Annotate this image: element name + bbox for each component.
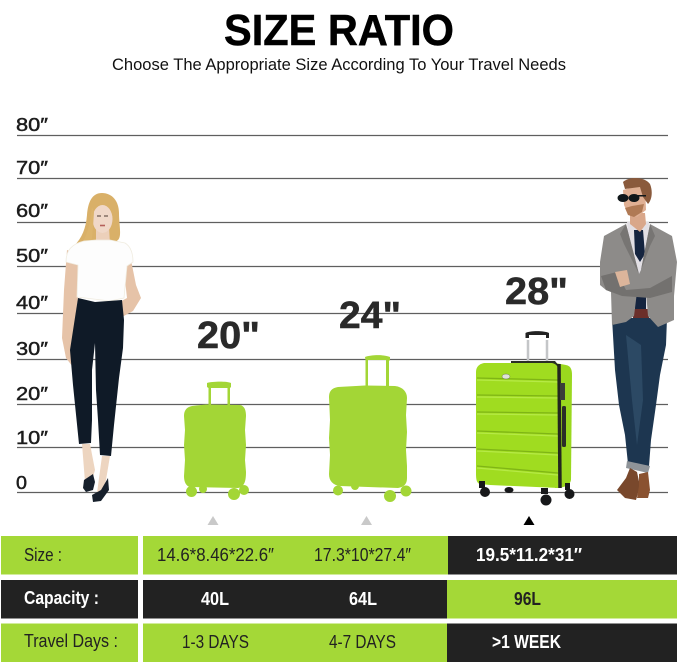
zipper	[559, 364, 560, 488]
marker triangle 20 inch	[208, 516, 218, 525]
height scale: 10″	[16, 428, 49, 448]
subtitle: Choose The Appropriate Size According To Your Travel Needs	[112, 55, 566, 74]
row: size: 14.6*8.46*22.6″	[157, 545, 275, 565]
size label 28 inch: 28"	[505, 271, 568, 313]
heels	[83, 474, 109, 502]
rear shell	[555, 363, 572, 488]
white T-shirt	[66, 240, 133, 301]
ribs	[477, 378, 558, 473]
row: capacity: 40L	[201, 589, 229, 609]
marker triangle 24 inch	[361, 516, 372, 525]
woman figure	[62, 193, 141, 502]
shirt and tie	[627, 222, 649, 312]
arms	[62, 250, 81, 371]
badge	[502, 374, 510, 379]
rib highlights	[477, 380, 558, 475]
face	[623, 184, 646, 217]
height scale: 30″	[16, 339, 49, 359]
wheels	[479, 481, 574, 506]
size label 20 inch: 20"	[197, 315, 260, 357]
row: travel days: >1 WEEK	[492, 632, 561, 652]
jeans highlights	[626, 335, 643, 445]
height scale	[16, 115, 668, 493]
beard	[625, 204, 644, 217]
height scale: 50″	[16, 246, 49, 266]
row: capacity: Capacity :	[24, 588, 99, 608]
black trousers	[70, 298, 124, 456]
wheels	[333, 486, 343, 496]
eyes and lips	[97, 215, 108, 217]
body	[184, 404, 246, 488]
brown shoes	[617, 468, 640, 500]
grey blazer	[600, 224, 677, 327]
telescopic handle	[207, 382, 231, 405]
wheels	[186, 486, 197, 497]
top zipper edge	[511, 361, 560, 367]
rolled cuffs	[626, 461, 650, 473]
telescopic handle	[365, 355, 390, 386]
jeans	[612, 318, 667, 466]
luggage 20 inch silhouette	[184, 382, 249, 500]
row: size: 17.3*10*27.4″	[314, 545, 412, 565]
row: travel days	[1, 624, 677, 662]
neck	[630, 213, 646, 232]
side handle	[562, 406, 566, 447]
height scale: 80″	[16, 115, 49, 135]
crossed arms	[601, 272, 672, 298]
row: size	[1, 536, 677, 574]
size label 24 inch: 24"	[339, 295, 401, 337]
body	[329, 386, 407, 488]
height scale: 40″	[16, 293, 49, 313]
hair back	[74, 193, 120, 262]
row: capacity: 64L	[349, 589, 377, 609]
hair strands	[78, 207, 94, 268]
height scale: 20″	[16, 384, 49, 404]
lock	[560, 383, 565, 400]
row: travel days: Travel Days :	[24, 631, 118, 651]
height scale: 70″	[16, 158, 49, 178]
row: size: Size :	[24, 545, 62, 565]
luggage 28 inch photo	[476, 331, 574, 506]
neck and face	[96, 228, 110, 244]
row: travel days: 1-3 DAYS	[182, 632, 249, 652]
hand and watch	[615, 270, 630, 287]
row: size: 19.5*11.2*31″	[476, 545, 582, 565]
marker triangle 28 inch	[524, 516, 534, 525]
sunglasses	[618, 194, 646, 202]
front shell	[476, 363, 559, 488]
man figure	[600, 178, 677, 500]
handle	[528, 340, 547, 362]
title: SIZE RATIO	[224, 6, 454, 55]
hair	[623, 178, 652, 204]
luggage 24 inch silhouette	[329, 355, 412, 502]
height scale: 0	[16, 473, 27, 493]
legs	[82, 444, 110, 495]
row: capacity	[1, 580, 677, 618]
row: travel days: 4-7 DAYS	[329, 632, 396, 652]
height scale: 60″	[16, 201, 49, 221]
belt	[633, 309, 649, 318]
lapels	[620, 224, 655, 274]
row: capacity: 96L	[514, 589, 541, 609]
